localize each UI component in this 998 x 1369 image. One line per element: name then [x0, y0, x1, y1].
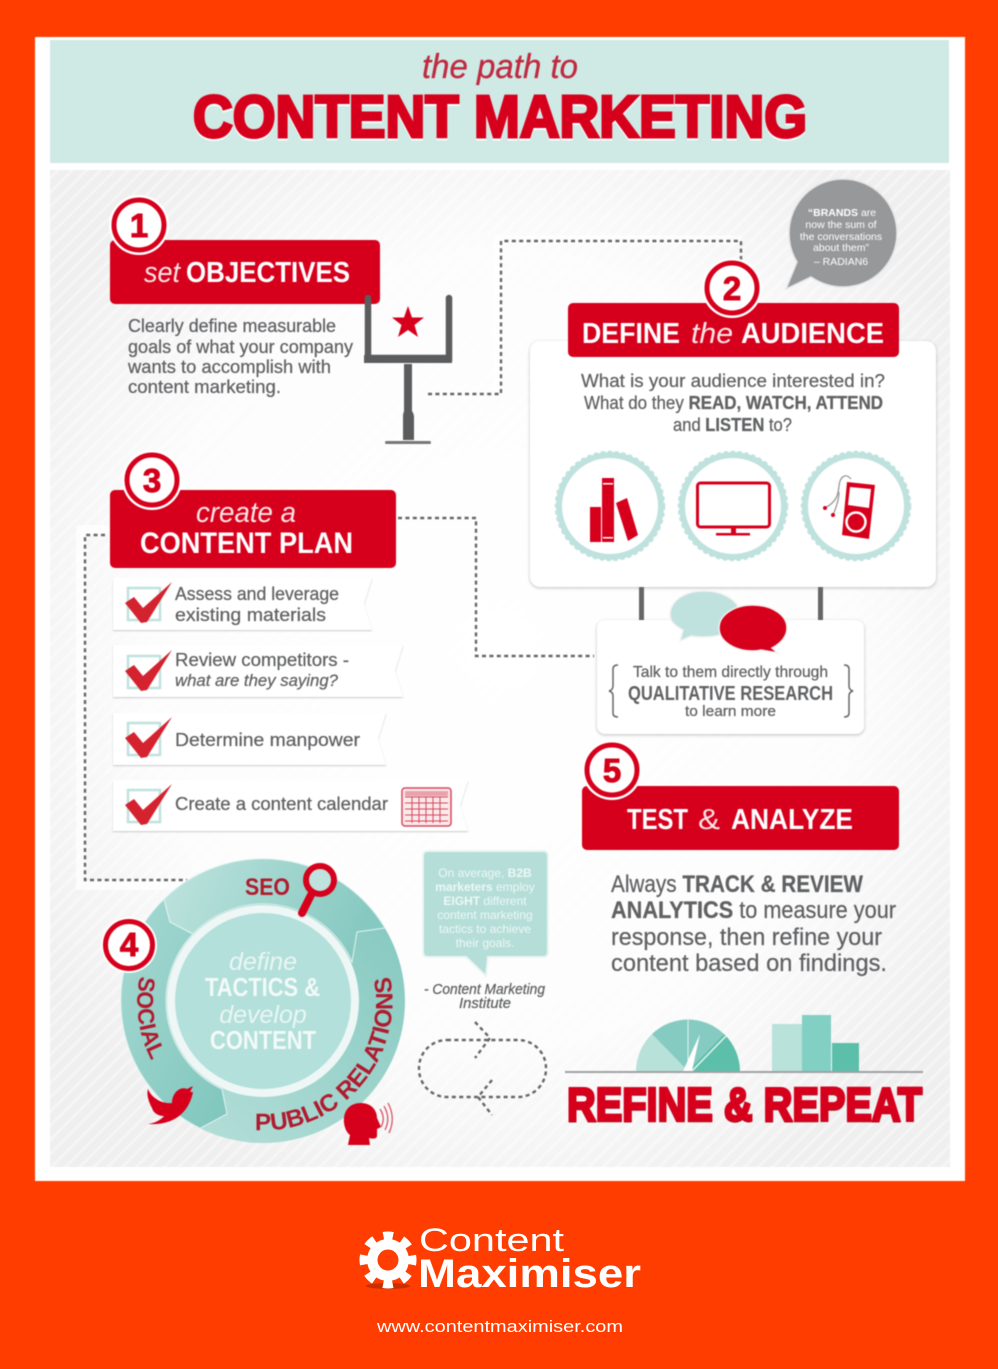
- text: audience questions: and LISTEN to?: [673, 414, 792, 435]
- icon: twitter bird: [147, 1086, 193, 1124]
- text: analytics body: ANALYTICS to measure your: [611, 897, 896, 924]
- quote bubble: brands: “BRANDS are: [808, 207, 876, 219]
- banner 1: [110, 240, 380, 304]
- text: objectives body: content marketing.: [128, 377, 281, 397]
- heading 2: AUDIENCE: [741, 318, 884, 350]
- badge 2: [702, 258, 762, 318]
- heading 1: set: [144, 257, 182, 289]
- heading 5: [627, 804, 853, 836]
- wheel ring: [121, 859, 405, 1143]
- text: analytics body: Always TRACK & REVIEW: [611, 871, 863, 898]
- dotted connector 1 to 2: [428, 240, 742, 394]
- checklist item 1: existing materials: [175, 604, 326, 625]
- heading 5: &: [698, 804, 720, 836]
- left brace: [609, 665, 618, 717]
- text: research copy: QUALITATIVE RESEARCH: [628, 683, 833, 705]
- text: content marketing institute: - Content Marketing: [424, 982, 545, 998]
- main content background: [50, 170, 950, 1167]
- heading 2: the: [691, 318, 733, 350]
- panel: qualitative research: [597, 591, 864, 734]
- wheel centre: [167, 905, 359, 1097]
- panel: step 4 tactics wheel: [102, 858, 406, 1146]
- infographic: [34, 36, 966, 1182]
- white page panel: [35, 37, 965, 1181]
- heading 1: OBJECTIVES: [186, 257, 350, 289]
- white card: [530, 341, 936, 587]
- text: analytics body: content based on findings.: [611, 950, 887, 977]
- connector poles: [639, 587, 823, 621]
- icon: music player: [802, 452, 910, 560]
- quote bubble: brands: the conversations: [800, 231, 882, 243]
- panel: step 3 create a content plan: [110, 450, 468, 831]
- panel: step 2 define the audience: [530, 258, 936, 587]
- icon: books: [556, 452, 664, 560]
- badge 4: [101, 917, 157, 973]
- heading 2: [582, 318, 884, 350]
- icon: red speech bubble: [719, 605, 787, 653]
- title: content marketing: CONTENT MARKETING: [193, 84, 807, 150]
- heading: refine and repeat: REFINE & REPEAT: [567, 1078, 922, 1130]
- right brace: [844, 665, 853, 717]
- badge 5: [582, 740, 642, 800]
- chart: gauge: [636, 1020, 740, 1071]
- banner 5: [582, 786, 899, 850]
- text: research copy: Talk to them directly through: [633, 664, 828, 681]
- callout: b2b marketers: tactics to achieve: [439, 922, 531, 936]
- wheel centre: CONTENT: [210, 1025, 316, 1055]
- checklist item 4: [113, 780, 468, 831]
- quote bubble: brands: – RADIAN6: [814, 256, 868, 268]
- title: the path to: the path to: [422, 48, 578, 86]
- text: objectives body: [127, 316, 353, 397]
- arrow segment: social: [121, 899, 227, 1128]
- banner 3: [110, 490, 396, 568]
- wheel centre: define: [229, 948, 297, 976]
- dotted connector 3 to qualitative research: [398, 518, 594, 656]
- icon: goal post with star: [364, 298, 452, 444]
- icon: teal speech bubble: [670, 591, 740, 641]
- callout: b2b marketers: marketers employ: [435, 880, 535, 894]
- text: audience questions: What do they READ, WATCH, ATTEND: [584, 392, 883, 413]
- banner 2: [568, 303, 899, 357]
- icon: television: [679, 452, 787, 560]
- text: research copy: to learn more: [685, 703, 776, 720]
- chart: bars: [772, 1015, 859, 1071]
- footer logo: [364, 1222, 641, 1336]
- checklist item 2: Review competitors -: [175, 649, 349, 670]
- wheel centre: TACTICS &: [205, 972, 320, 1002]
- icon: gear: [364, 1236, 412, 1289]
- text: audience questions: [581, 370, 885, 435]
- panel: step 5 test and analyze: [565, 740, 923, 1130]
- arrow segment: seo: [164, 859, 385, 962]
- label: seo: SEO: [245, 874, 290, 901]
- logo word: content: Content: [419, 1222, 564, 1258]
- checklist item 3: [113, 713, 386, 765]
- checklist item 1: Assess and leverage: [175, 583, 339, 604]
- divider line: [565, 1071, 923, 1073]
- badge 5: 5: [603, 752, 621, 789]
- icon: calendar: [402, 788, 451, 826]
- quote bubble: brands: about them”: [813, 242, 870, 254]
- heading 3: [140, 497, 353, 560]
- text: objectives body: Clearly define measurable: [128, 316, 336, 336]
- text: content marketing institute: Institute: [459, 996, 511, 1012]
- checklist item 1: [113, 578, 372, 630]
- quote bubble: brands: now the sum of: [805, 219, 877, 231]
- checklist item 2: [113, 645, 403, 697]
- heading 3: create a: [196, 497, 296, 529]
- badge 3: [122, 450, 182, 510]
- icon: magnifying glass: [302, 866, 334, 913]
- website url: www.contentmaximiser.com: [376, 1317, 623, 1336]
- text: objectives body: wants to accomplish with: [127, 357, 331, 377]
- badge 1: 1: [130, 207, 148, 244]
- icon: dotted repeat loop: [419, 1022, 546, 1115]
- heading 5: ANALYZE: [731, 804, 853, 836]
- label: social: SOCIAL: [136, 976, 162, 1060]
- quote bubble: brands: [786, 179, 897, 289]
- text: research copy: [628, 664, 833, 720]
- badge 3: 3: [143, 462, 161, 499]
- logo word: maximiser: Maximiser: [418, 1252, 641, 1296]
- heading 3: CONTENT PLAN: [140, 527, 353, 560]
- callout: b2b marketers: [423, 851, 548, 976]
- text: analytics body: [611, 871, 896, 977]
- dotted connector 3 to 4: [76, 530, 187, 885]
- text: audience questions: What is your audience interested in?: [581, 370, 885, 391]
- callout: b2b marketers: EIGHT different: [443, 894, 527, 908]
- label: public relations: PUBLIC RELATIONS: [256, 977, 394, 1131]
- header panel: [50, 40, 949, 163]
- heading 5: TEST: [627, 804, 688, 836]
- callout: b2b marketers: their goals.: [456, 936, 514, 950]
- checklist item 2: what are they saying?: [175, 671, 339, 690]
- badge 1: [109, 195, 169, 255]
- badge 2: 2: [723, 270, 741, 307]
- heading 2: DEFINE: [582, 318, 680, 350]
- checklist item 3: Determine manpower: [175, 729, 360, 750]
- icon: speaking head: [344, 1103, 392, 1145]
- badge 4: 4: [120, 926, 139, 963]
- wheel centre: develop: [219, 1001, 307, 1029]
- text: content marketing institute: [424, 982, 545, 1012]
- checklist item 4: Create a content calendar: [175, 793, 388, 814]
- callout: b2b marketers: On average, B2B: [438, 866, 532, 880]
- panel: step 1 set objectives: [109, 195, 452, 444]
- text: analytics body: response, then refine your: [611, 924, 882, 951]
- text: objectives body: goals of what your company: [128, 337, 353, 357]
- callout: b2b marketers: content marketing: [437, 908, 533, 922]
